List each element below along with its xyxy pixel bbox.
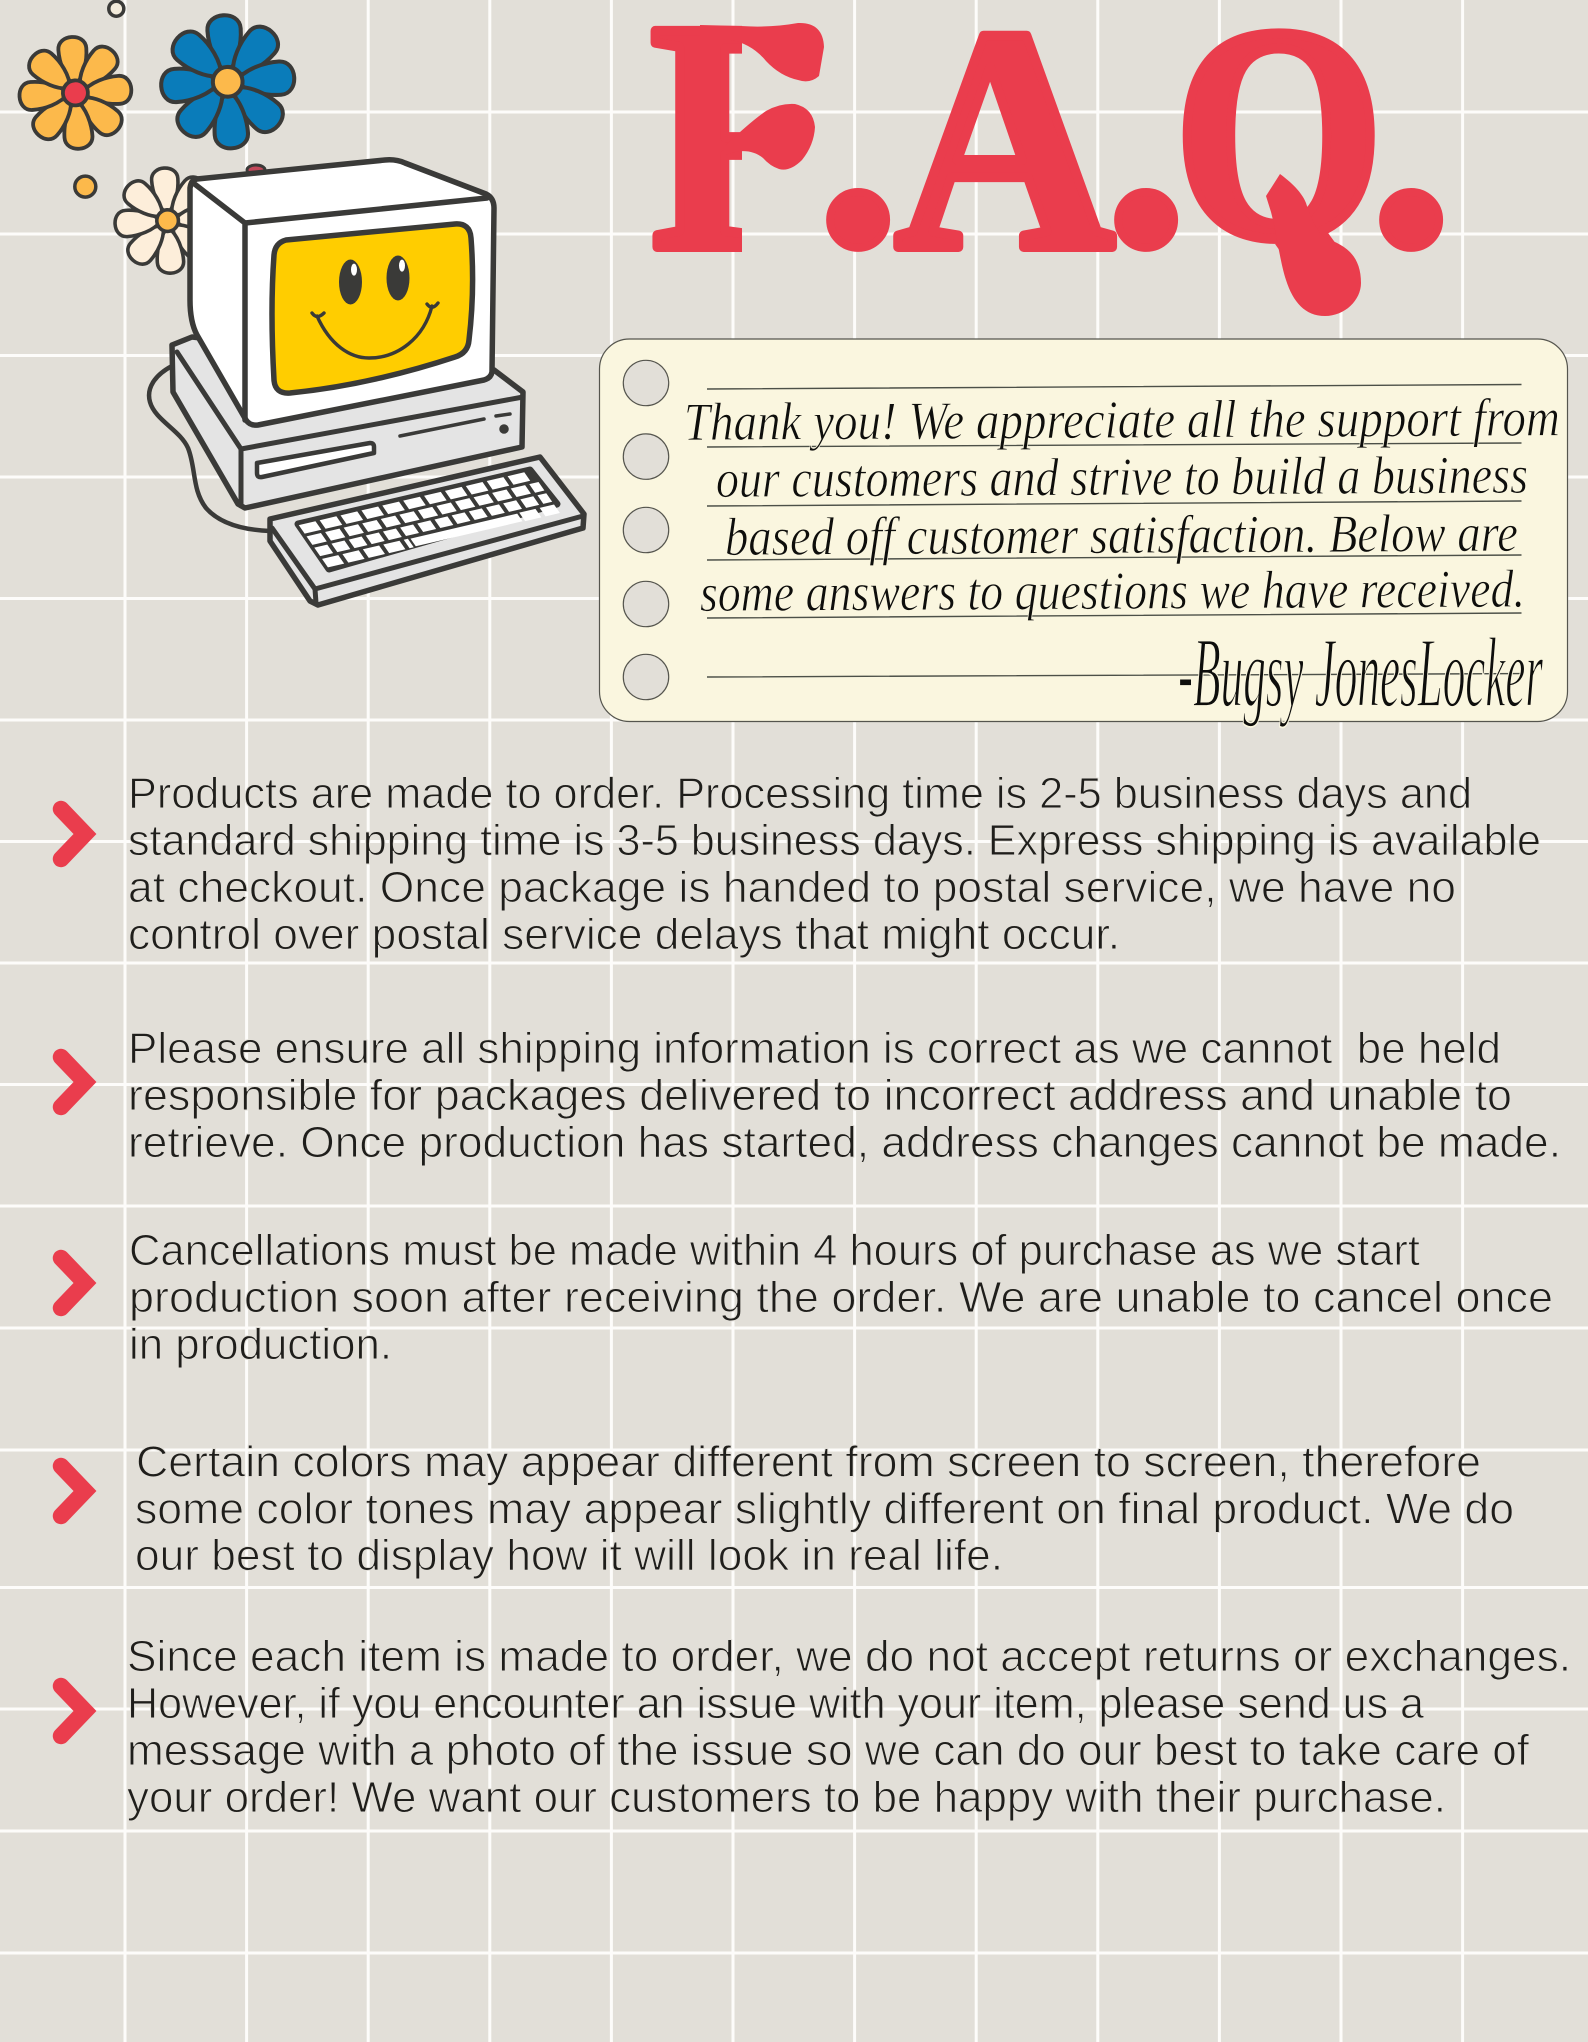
text block: message with a photo of the issue so we can do our best to take care of	[127, 1726, 1530, 1775]
FAQ item: shipping times	[61, 769, 1541, 959]
icon: chevron	[61, 1057, 85, 1107]
panel: thank-you note card	[600, 339, 1568, 728]
cable	[149, 366, 270, 531]
text block: Please ensure all shipping information is correct as we cannot be held	[128, 1024, 1501, 1073]
icon: chevron	[61, 1466, 85, 1516]
text block: responsible for packages delivered to incorrect address and unable to	[128, 1071, 1512, 1120]
computer base	[172, 337, 523, 508]
FAQ item: shipping information	[61, 1024, 1561, 1167]
text block: standard shipping time is 3-5 business days. Express shipping is available	[128, 816, 1541, 865]
text block: your order! We want our customers to be happy with their purchase.	[127, 1773, 1446, 1822]
FAQ item: cancellations	[61, 1226, 1553, 1369]
smile	[312, 303, 438, 358]
text block	[127, 1632, 1571, 1822]
text block: Certain colors may appear different from screen to screen, therefore	[136, 1438, 1481, 1486]
text block: our best to display how it will look in real life.	[135, 1531, 1003, 1580]
icon: chevron	[61, 809, 85, 859]
text block	[128, 769, 1541, 959]
text block: some color tones may appear slightly different on final product. We do	[135, 1484, 1514, 1534]
text block: thank-you message	[684, 387, 1560, 623]
monitor	[190, 160, 494, 425]
icon: retro computer with smiley screen	[149, 160, 584, 605]
title: F.A.Q.	[650, 0, 1454, 319]
FAQ item: colors	[61, 1438, 1514, 1580]
icon: chevron	[61, 1686, 85, 1736]
decorative F arm terminals	[700, 23, 824, 170]
text block: However, if you encounter an issue with your item, please send us a	[127, 1679, 1425, 1728]
FAQ item: returns	[61, 1632, 1571, 1822]
icon: chevron	[61, 1258, 85, 1308]
text block: at checkout. Once package is handed to postal service, we have no	[128, 863, 1456, 912]
eyes	[339, 260, 362, 304]
text block: Since each item is made to order, we do not accept returns or exchanges.	[127, 1632, 1571, 1681]
text block: retrieve. Once production has started, address changes cannot be made.	[128, 1118, 1561, 1167]
text block: in production.	[129, 1320, 392, 1369]
keyboard	[270, 457, 584, 605]
icon: blue flower	[157, 11, 299, 153]
icon: small cream circle	[109, 1, 124, 16]
screen	[272, 224, 473, 393]
text block	[135, 1438, 1514, 1580]
icon: orange flower	[16, 33, 135, 153]
icon: orange dot	[75, 176, 96, 197]
icon: hidden red petal behind monitor	[247, 165, 265, 175]
text block: production soon after receiving the order. We are unable to cancel once	[129, 1273, 1553, 1322]
text block	[129, 1226, 1553, 1369]
icon: binder holes	[623, 360, 669, 700]
text block: Cancellations must be made within 4 hours of purchase as we start	[129, 1226, 1420, 1275]
text block	[128, 1024, 1561, 1167]
icon: cream flower	[111, 164, 224, 277]
text block: control over postal service delays that might occur.	[128, 910, 1120, 959]
text block: Products are made to order. Processing time is 2-5 business days and	[128, 769, 1472, 818]
